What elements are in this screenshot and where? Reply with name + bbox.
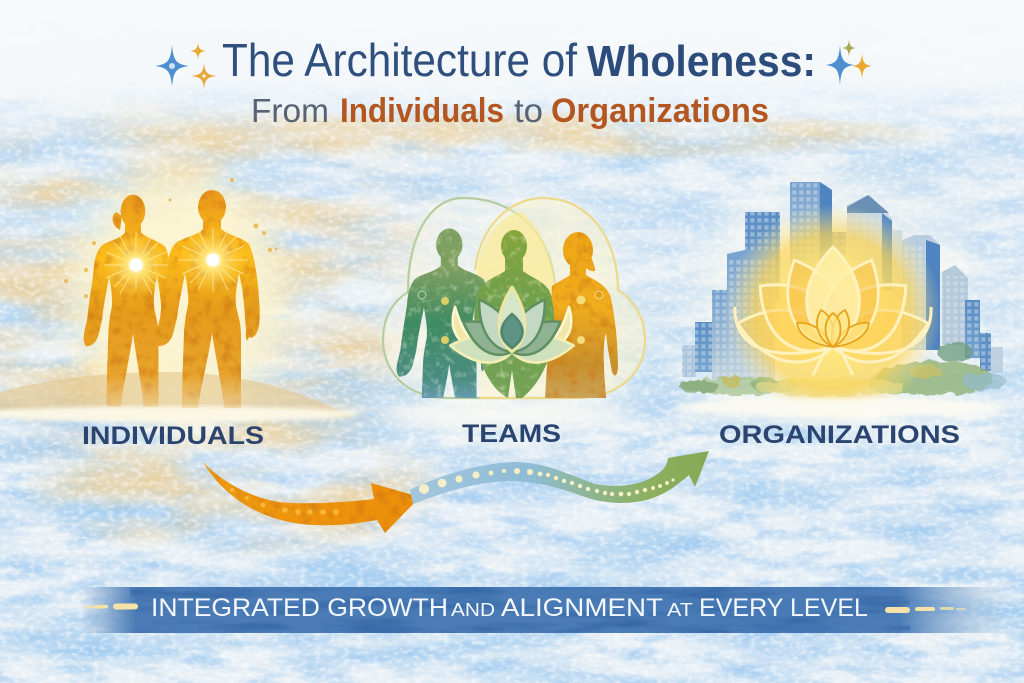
chakra points — [418, 291, 603, 344]
panel: teams — [383, 198, 645, 448]
figure: right person — [156, 190, 260, 408]
banner text: INTEGRATED GROWTH — [151, 594, 448, 622]
banner text — [151, 594, 868, 622]
front buildings left — [682, 250, 775, 380]
panel: individuals — [0, 175, 360, 450]
left dashes — [84, 604, 138, 610]
title line two: Organizations — [551, 92, 769, 130]
right dashes — [885, 607, 966, 613]
banner band — [80, 587, 1010, 633]
glow behind figures — [75, 175, 285, 425]
title line two: From — [251, 92, 329, 129]
title line two — [251, 92, 769, 130]
cloud outline — [383, 198, 645, 398]
arrow: blue to green swoosh — [410, 451, 709, 504]
banner text: ALIGNMENT — [501, 594, 663, 622]
label: teams: TEAMS — [462, 420, 561, 448]
figure: left person — [84, 195, 175, 407]
title line one: The Architecture of — [222, 34, 577, 86]
panel: organizations — [675, 182, 1007, 449]
figure: gold person — [545, 232, 618, 398]
banner text: AND — [451, 600, 495, 620]
title line one — [222, 34, 816, 86]
light burst: left — [102, 231, 170, 299]
large lotus — [732, 247, 934, 375]
back buildings — [745, 182, 902, 302]
title line one: Wholeness: — [587, 37, 816, 86]
front buildings right — [902, 235, 1003, 373]
foliage — [680, 342, 1007, 396]
label: organizations: ORGANIZATIONS — [719, 421, 960, 449]
arrow: orange — [203, 462, 420, 533]
ground fade — [675, 399, 1005, 415]
lotus — [449, 287, 575, 365]
figure: green person — [396, 228, 486, 398]
skyline — [682, 182, 1003, 380]
light burst: right — [178, 226, 248, 294]
icon: right sparkles — [826, 39, 872, 85]
splatter — [64, 178, 278, 298]
banner text: AT — [667, 600, 693, 620]
glow — [725, 204, 941, 420]
hill — [0, 372, 352, 418]
title — [222, 34, 816, 130]
label: individuals: INDIVIDUALS — [82, 422, 264, 450]
title line two: Individuals — [340, 92, 504, 130]
small lotus — [797, 310, 869, 347]
icon: left sparkles — [155, 42, 217, 89]
banner — [80, 587, 1010, 633]
banner text: EVERY LEVEL — [699, 594, 868, 622]
title line two: to — [514, 92, 543, 129]
figure: centre person — [474, 230, 554, 398]
